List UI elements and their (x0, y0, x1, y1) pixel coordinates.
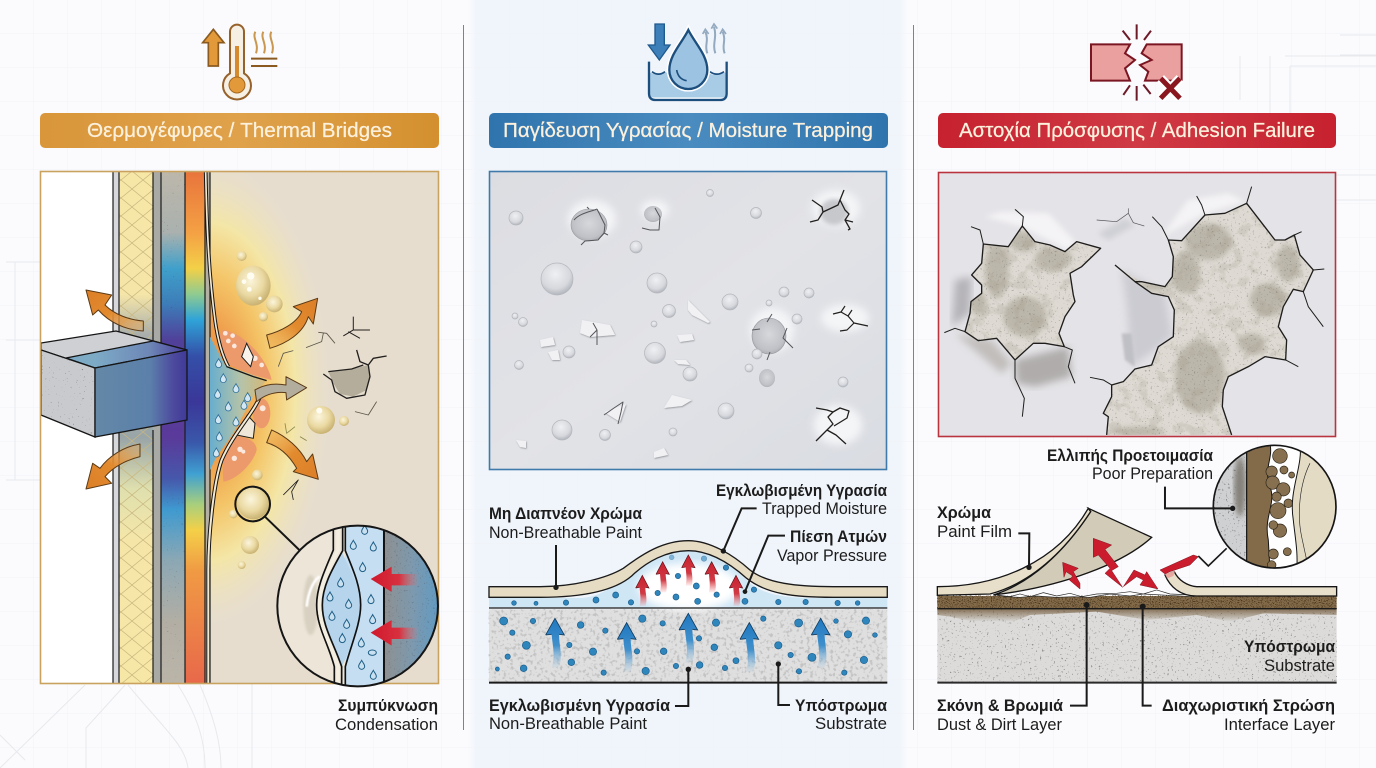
label: substrate (1244, 637, 1335, 675)
surface blisters (509, 190, 848, 440)
label: substrate: Υπόστρωμα (1244, 637, 1335, 656)
diagram: adhesion failure cross section (937, 443, 1340, 706)
label: trapped moisture lower (489, 696, 671, 733)
label: non-breathable paint: Non-Breathable Paint (489, 523, 642, 542)
beam: concrete balcony slab (41, 331, 187, 437)
small bubbles below (229, 487, 269, 569)
heading: adhesion failure: Αστοχία Πρόσφυσης / Adhesion Failure (959, 119, 1315, 142)
heading: thermal bridges: Θερμογέφυρες / Thermal Bridges (87, 119, 392, 142)
label: trapped moisture lower: Εγκλωβισμένη Υγρασία (489, 696, 671, 715)
hole edges and cracks (944, 187, 1324, 435)
label: condensation (335, 696, 438, 734)
arrows: vapor pressure (636, 555, 743, 606)
leader lines (553, 508, 790, 706)
label: substrate: Υπόστρωμα (795, 696, 888, 715)
condensation bubbles (236, 251, 349, 480)
substrate and dirt layer (937, 590, 1337, 683)
shadows around peeling flaps (952, 193, 1245, 387)
paint film (489, 541, 887, 597)
trapped liquid layer (489, 550, 887, 610)
label: vapor pressure: Πίεση Ατμών (790, 527, 887, 546)
label: poor preparation: Ελλιπής Προετοιμασία (1047, 446, 1213, 465)
heading: thermal bridges (40, 113, 439, 148)
blisters (220, 330, 272, 482)
label: dust and dirt layer: Dust & Dirt Layer (937, 715, 1062, 734)
label: substrate: Substrate (1264, 656, 1335, 675)
label: condensation: Συμπύκνωση (338, 696, 438, 715)
label: non-breathable paint: Μη Διαπνέον Χρώμα (489, 504, 642, 523)
label: poor preparation (1047, 446, 1213, 483)
heading: moisture trapping: Παγίδευση Υγρασίας / Moisture Trapping (503, 119, 873, 142)
right paint film (1165, 571, 1337, 596)
label: substrate (795, 696, 888, 733)
label: trapped moisture: Εγκλωβισμένη Υγρασία (716, 481, 887, 500)
cracks and spalled hole (278, 317, 387, 500)
label: interface layer: Interface Layer (1224, 715, 1335, 734)
column divider right (912, 25, 914, 730)
peeled paint flap (937, 508, 1152, 595)
label: substrate: Substrate (815, 714, 887, 733)
callout: condensation magnifier (235, 487, 441, 690)
panel: peeling paint photo (938, 172, 1336, 437)
label: poor preparation: Poor Preparation (1092, 464, 1213, 483)
label: interface layer: Διαχωριστική Στρώση (1162, 696, 1335, 715)
label: non-breathable paint (489, 504, 642, 542)
label: dust and dirt layer: Σκόνη & Βρωμιά (937, 696, 1064, 715)
icon: water drop in basin (648, 24, 727, 100)
paint flakes (516, 300, 710, 458)
panel: thermal bridge wall section (40, 150, 445, 684)
paint film lines (206, 170, 267, 684)
substrate (489, 609, 887, 683)
arrows: rising moisture (546, 613, 830, 672)
arrows: heat flow (86, 290, 318, 489)
surface cracks (574, 190, 868, 444)
soft highlights around defects (568, 190, 869, 445)
label: paint film: Paint Film (937, 522, 1012, 541)
label: vapor pressure (777, 527, 887, 565)
label: paint film (937, 503, 1012, 541)
column divider left (462, 25, 464, 730)
label: trapped moisture: Trapped Moisture (762, 499, 887, 518)
label: vapor pressure: Vapor Pressure (777, 546, 887, 565)
heading: adhesion failure (938, 113, 1336, 148)
label: paint film: Χρώμα (937, 503, 992, 522)
heading: moisture trapping (489, 113, 888, 148)
label: trapped moisture (716, 481, 887, 518)
icon: thermometer with rising heat (203, 25, 277, 99)
icon: cracked adhesion block (1091, 24, 1182, 101)
arrows: delamination (1063, 538, 1198, 589)
callout: poor preparation magnifier (1198, 443, 1340, 570)
moisture zone with droplets (210, 337, 267, 470)
leader lines (1018, 487, 1235, 706)
label: dust and dirt layer (937, 696, 1064, 734)
label: condensation: Condensation (335, 715, 438, 734)
water dots (495, 555, 877, 675)
label: interface layer (1162, 696, 1335, 734)
diagram: non-breathable paint cross section (489, 508, 887, 706)
panel: moisture blisters surface (490, 172, 886, 470)
label: trapped moisture lower: Non-Breathable Paint (489, 714, 647, 733)
exposed plaster (962, 200, 1318, 437)
